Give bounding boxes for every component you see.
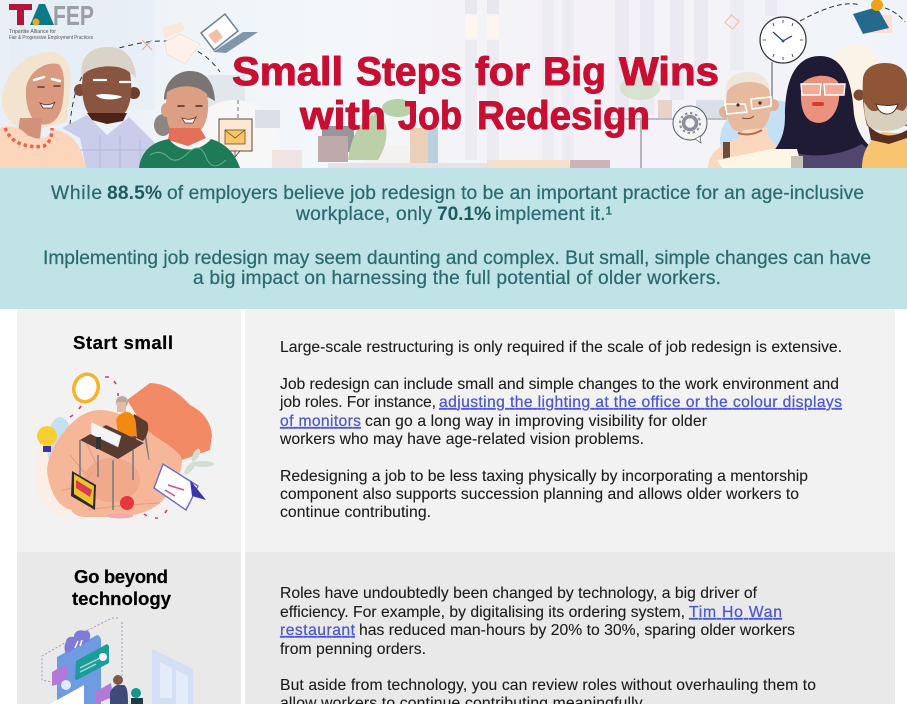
illustration: hand holding a desk with older worker xyxy=(35,371,214,518)
title: for xyxy=(475,50,530,94)
title: Small xyxy=(232,50,343,94)
person: older woman xyxy=(0,52,86,168)
paragraph: mentorship: component also supports succession planning and allows older workers to xyxy=(280,486,799,503)
intro statistic text: implement it.¹ xyxy=(495,204,612,225)
illustration: technology interfaces and workers xyxy=(42,618,193,704)
paragraph: mentorship: continue contributing. xyxy=(280,504,431,521)
header illustration banner xyxy=(0,0,907,180)
person: woman in hijab xyxy=(717,56,872,168)
gear speech bubble xyxy=(673,106,707,143)
title: Job xyxy=(398,94,462,138)
heading: go beyond technology: Go beyond xyxy=(74,566,168,587)
title: Big xyxy=(543,50,606,94)
paragraph: digitalising orders with link: Tim Ho Wan xyxy=(689,604,782,621)
icon: clock xyxy=(70,371,102,405)
paragraph: digitalising orders with link: has reduced man-hours by 20% to 30%, sparing older workers xyxy=(359,622,795,639)
paragraph: small changes with link: adjusting the lighting at the office or the colour displays xyxy=(439,394,842,411)
clock xyxy=(760,17,806,106)
intro statistic text: While xyxy=(51,183,102,204)
person: older man with glasses xyxy=(708,72,779,168)
intro explanation text: a big impact on harnessing the full potential of older workers. xyxy=(193,268,721,289)
icon: light bulb xyxy=(37,426,57,452)
logo: TAFEP: Fair & Progressive Employment Practices xyxy=(9,35,93,41)
logo: TAFEP: FEP xyxy=(53,0,94,31)
title: with xyxy=(299,94,386,138)
intro statistic text: 88.5% xyxy=(107,183,162,204)
heading: go beyond technology: technology xyxy=(72,588,172,609)
intro statistic text xyxy=(51,183,864,225)
title: Steps xyxy=(356,50,462,94)
background buildings xyxy=(190,0,879,168)
person: older man with moustache xyxy=(62,47,155,168)
panel: go beyond technology heading cell xyxy=(17,552,241,704)
paragraph: large-scale restructuring: Large-scale restructuring is only required if the scale of job redesign is extensive. xyxy=(280,339,842,356)
intro explanation text xyxy=(43,248,871,289)
paragraph: small changes with link: job roles. For instance, xyxy=(279,394,436,411)
paragraph: mentorship: Redesigning a job to be less taxing physically by incorporating a mentorship xyxy=(280,468,808,485)
icon: tablet xyxy=(71,471,96,510)
title: Redesign xyxy=(477,94,650,138)
paragraph: review roles xyxy=(280,677,816,704)
blue envelope with alert xyxy=(724,0,906,34)
intro explanation text: Implementing job redesign may seem daunting and complex. But small, simple changes can have xyxy=(43,248,871,269)
heading: go beyond technology xyxy=(72,566,172,609)
paragraph: small changes with link: of monitors xyxy=(280,413,361,430)
person: woman with grey hair and green top xyxy=(139,71,240,168)
paragraph: mentorship xyxy=(280,468,808,521)
leaves and confetti xyxy=(70,377,214,518)
intro statistic text: workplace, only xyxy=(295,204,432,225)
paragraph: digitalising orders with link xyxy=(280,585,795,658)
row: go beyond technology xyxy=(17,552,895,704)
heading: start small: Start small xyxy=(73,332,173,353)
panel: go beyond technology body cell xyxy=(245,552,895,704)
paragraph: small changes with link xyxy=(279,376,842,448)
panel: start small heading cell xyxy=(17,309,241,552)
intro statistic text: of employers believe job redesign to be an important practice for an age-inclusive xyxy=(167,183,864,204)
paragraph: digitalising orders with link: Roles have undoubtedly been changed by technology, a big driver of xyxy=(280,585,758,602)
title xyxy=(232,50,719,138)
logo: TAFEP xyxy=(9,4,94,40)
paragraph: small changes with link: Job redesign can include small and simple changes to the work environment and xyxy=(280,376,839,393)
title: Wins xyxy=(619,50,719,94)
intro band xyxy=(0,168,907,309)
paragraph: digitalising orders with link: from penning orders. xyxy=(280,641,426,658)
paragraph: review roles: But aside from technology, you can review roles without overhauling them to xyxy=(280,677,816,694)
row: start small xyxy=(17,309,895,552)
icon: calendar xyxy=(154,464,206,510)
paragraph: digitalising orders with link: efficiency. For example, by digitalising its ordering system, xyxy=(280,604,685,621)
paragraph: digitalising orders with link: restaurant xyxy=(280,622,356,639)
paragraph: small changes with link: can go a long way in improving visibility for older xyxy=(365,413,707,430)
person: older man with beard xyxy=(854,63,907,168)
panel: start small body cell xyxy=(245,309,895,552)
dashed arc and office icons left xyxy=(70,14,258,125)
paragraph: small changes with link: workers who may have age-related vision problems. xyxy=(279,431,644,448)
logo: TAFEP: Tripartite Alliance for xyxy=(9,29,56,35)
intro statistic text: 70.1% xyxy=(437,204,491,225)
envelope speech bubble xyxy=(219,119,252,157)
